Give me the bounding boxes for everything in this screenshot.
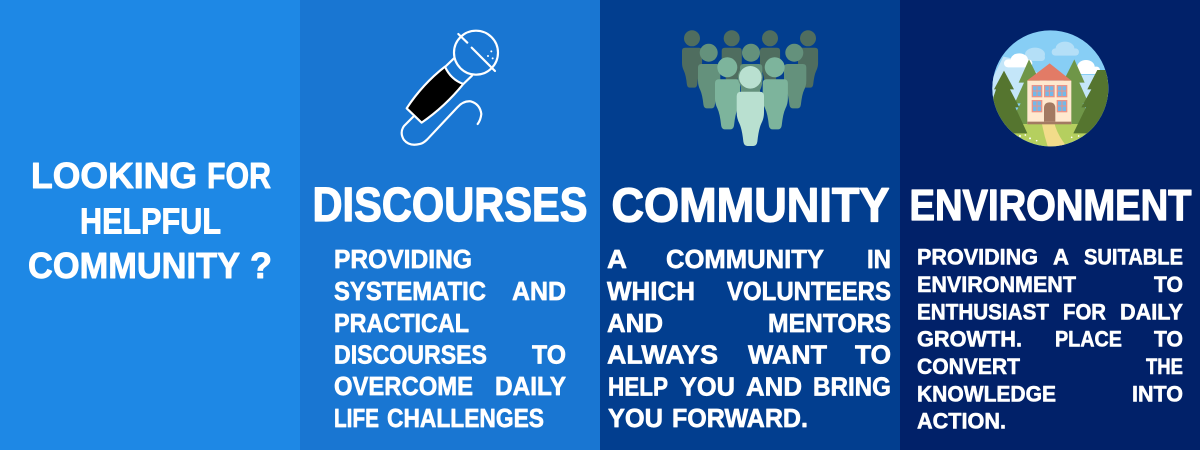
- text: community description: BRING: [813, 374, 891, 402]
- text: environment description: ENVIRONMENT: [917, 272, 1076, 297]
- text: discourses description: SYSTEMATIC: [334, 278, 486, 306]
- text: community description: [607, 246, 891, 433]
- text: community description: FORWARD.: [672, 405, 808, 433]
- panel: intro: [0, 0, 300, 450]
- text: environment description: PLACE: [1055, 326, 1122, 352]
- panel: discourses: [300, 0, 600, 450]
- text: discourses description: PROVIDING: [334, 246, 472, 274]
- text: discourses description: OVERCOME: [334, 373, 473, 401]
- text: environment description: ENTHUSIAST: [917, 300, 1049, 324]
- text: community description: MENTORS: [768, 310, 891, 338]
- text: environment description: GROWTH.: [917, 326, 1022, 352]
- icon: house in forest: [992, 30, 1108, 146]
- text: environment description: TO: [1154, 272, 1183, 297]
- heading: looking for helpful community: LOOKING: [31, 155, 197, 196]
- text: environment description: PROVIDING: [917, 244, 1038, 270]
- text: environment description: ACTION.: [917, 408, 1006, 434]
- text: environment description: DAILY: [1120, 300, 1183, 324]
- text: discourses description: CHALLENGES: [387, 405, 544, 433]
- icon: microphone: [402, 31, 498, 145]
- text: discourses description: LIFE: [334, 405, 379, 433]
- text: discourses description: DISCOURSES: [334, 342, 487, 370]
- text: discourses description: AND: [512, 278, 566, 306]
- text: community description: WANT: [748, 342, 827, 370]
- text: community description: YOU: [608, 405, 663, 433]
- heading: looking for helpful community: ?: [250, 245, 272, 286]
- icon: group of people: [682, 30, 818, 146]
- text: community description: AND: [607, 310, 663, 338]
- text: community description: TO: [855, 342, 891, 370]
- text: environment description: INTO: [1132, 382, 1183, 406]
- heading: looking for helpful community: FOR: [207, 155, 271, 196]
- text: environment description: TO: [1154, 326, 1183, 352]
- text: community description: VOLUNTEERS: [727, 278, 891, 306]
- text: environment description: FOR: [1063, 300, 1106, 324]
- panel: community: [600, 0, 900, 450]
- heading: community: COMMUNITY: [612, 180, 890, 232]
- text: environment description: CONVERT: [917, 354, 1020, 379]
- text: community description: AND: [746, 374, 802, 402]
- text: community description: ALWAYS: [607, 342, 718, 370]
- text: environment description: THE: [1146, 354, 1183, 379]
- text: environment description: KNOWLEDGE: [917, 382, 1056, 406]
- text: discourses description: TO: [532, 342, 566, 370]
- text: discourses description: [334, 246, 566, 433]
- text: environment description: A: [1053, 244, 1069, 270]
- text: community description: A: [607, 246, 627, 274]
- text: environment description: SUITABLE: [1084, 244, 1183, 270]
- heading: looking for helpful community: HELPFUL: [80, 200, 221, 242]
- text: discourses description: DAILY: [495, 373, 566, 401]
- text: community description: WHICH: [607, 278, 695, 306]
- heading: looking for helpful community: COMMUNITY: [28, 245, 240, 286]
- heading: looking for helpful community: [28, 155, 272, 286]
- text: environment description: [917, 244, 1183, 434]
- panel: environment: [900, 0, 1200, 450]
- text: community description: HELP: [608, 374, 668, 402]
- text: discourses description: PRACTICAL: [334, 310, 469, 338]
- heading: discourses: DISCOURSES: [312, 179, 588, 232]
- text: community description: IN: [867, 246, 891, 274]
- text: community description: COMMUNITY: [666, 246, 824, 274]
- text: community description: YOU: [680, 374, 735, 402]
